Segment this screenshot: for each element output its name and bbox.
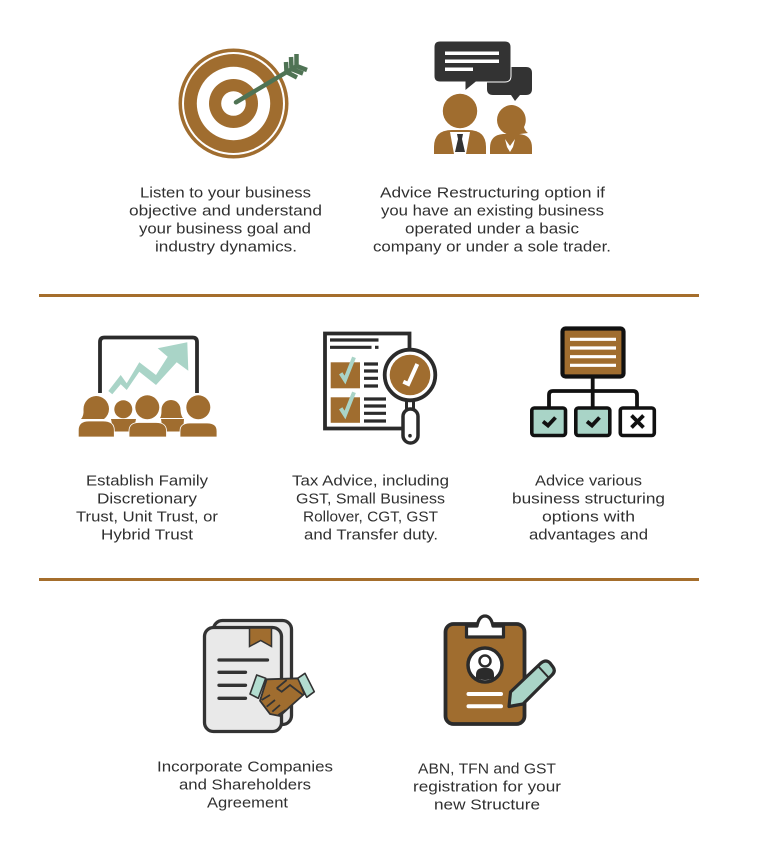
text: incorporate companies: Agreement <box>207 794 289 812</box>
text: tax advice: Tax Advice, including <box>292 472 449 490</box>
text: establish trust: Discretionary <box>97 490 198 508</box>
text: tax advice: Rollover, CGT, GST <box>303 508 438 526</box>
text: listen to objective: objective and understand <box>129 202 322 220</box>
icon: audience watching growth chart <box>78 338 217 437</box>
icon: target with arrow <box>178 48 307 158</box>
text: registration: new Structure <box>434 796 540 814</box>
text: establish trust <box>76 472 218 544</box>
text: advice restructuring: Advice Restructuring option if <box>380 184 606 202</box>
text: structuring options: business structuring <box>512 490 665 508</box>
text: registration <box>413 760 561 814</box>
text: incorporate companies <box>157 758 333 812</box>
text: structuring options: Advice various <box>535 472 642 490</box>
text: advice restructuring: company or under a sole trader. <box>373 238 611 256</box>
text: structuring options: advantages and <box>529 526 648 544</box>
text: structuring options <box>512 472 665 544</box>
text: tax advice: and Transfer duty. <box>304 526 438 544</box>
icon: clipboard with profile and pencil <box>446 616 554 724</box>
text: registration: registration for your <box>413 778 561 796</box>
divider <box>39 578 699 581</box>
text: tax advice: GST, Small Business <box>296 490 445 508</box>
text: structuring options: options with <box>542 508 635 526</box>
icon: two people talking <box>434 41 532 154</box>
text: incorporate companies: Incorporate Companies <box>157 758 333 776</box>
text: listen to objective: your business goal and <box>139 220 311 238</box>
text: listen to objective: industry dynamics. <box>155 238 297 256</box>
text: establish trust: Establish Family <box>86 472 209 490</box>
divider <box>39 294 699 297</box>
text: advice restructuring: you have an existing business <box>381 202 604 220</box>
icon: agreement documents and handshake <box>204 620 314 732</box>
text: advice restructuring: operated under a basic <box>405 220 580 238</box>
text: listen to objective <box>129 184 322 256</box>
text: establish trust: Trust, Unit Trust, or <box>76 508 218 526</box>
text: incorporate companies: and Shareholders <box>179 776 311 794</box>
text: establish trust: Hybrid Trust <box>101 526 194 544</box>
icon: business structure hierarchy <box>532 328 654 436</box>
text: advice restructuring <box>373 184 611 256</box>
text: tax advice <box>292 472 449 544</box>
text: listen to objective: Listen to your business <box>140 184 311 202</box>
icon: checklist under magnifying glass <box>325 334 435 443</box>
text: registration: ABN, TFN and GST <box>418 760 556 778</box>
